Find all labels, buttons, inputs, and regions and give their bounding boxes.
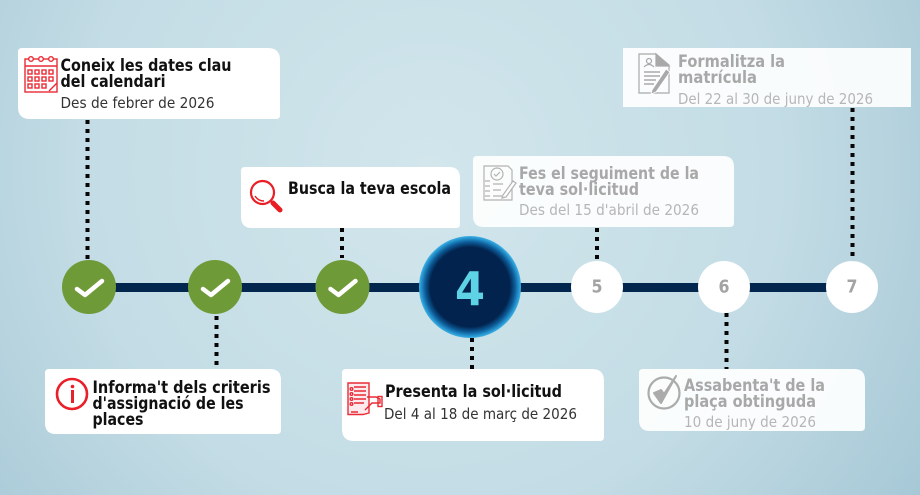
- heading: step 6: plaça obtinguda: [684, 392, 816, 411]
- heading: step 7: Formalitza la: [678, 52, 785, 71]
- icon: enrolment form: [639, 54, 670, 94]
- panel: step 6 assigned place: [639, 369, 865, 431]
- heading: step 1: del calendari: [60, 72, 166, 91]
- panel: step 5 tracking: [473, 156, 734, 227]
- step 3 marker: completed: [316, 260, 370, 314]
- icon: application form: [348, 383, 382, 414]
- panel: step 7 enrolment: [623, 48, 911, 108]
- step 5 marker: pending: [571, 261, 623, 313]
- connector: step 4: [470, 338, 474, 369]
- step 4 marker: current: 4: [455, 262, 485, 316]
- date: step 5: Des del 15 d'abril de 2026: [519, 201, 699, 219]
- step 7 marker: pending: 7: [846, 276, 858, 298]
- step 2 marker: completed: [188, 260, 242, 314]
- panel: step 2 criteria: [45, 369, 281, 434]
- heading: step 2: places: [92, 410, 144, 429]
- connector: step 3: [340, 228, 344, 258]
- step 1 marker: completed: [62, 260, 116, 314]
- heading: step 5: teva sol·licitud: [519, 180, 639, 199]
- heading: step 1: Coneix les dates clau: [60, 56, 232, 75]
- heading: step 6: Assabenta't de la: [684, 376, 825, 395]
- heading: step 4: Presenta la sol·licitud: [385, 382, 562, 401]
- step 7 marker: pending: [826, 261, 878, 313]
- step 5 marker: pending: 5: [592, 276, 602, 298]
- icon: calendar: [25, 57, 57, 92]
- step 4 marker: current: [419, 236, 521, 338]
- icon: checklist with pencil: [484, 166, 516, 200]
- date: step 4: Del 4 al 18 de març de 2026: [384, 405, 577, 423]
- heading: step 5: Fes el seguiment de la: [519, 164, 699, 183]
- step 6 marker: pending: [698, 261, 750, 313]
- icon: magnifier: [251, 181, 280, 210]
- connector: step 2: [214, 316, 218, 369]
- date: step 1: Des de febrer de 2026: [60, 94, 214, 112]
- connector: step 1: [86, 120, 90, 262]
- panel: step 1 dates: [18, 48, 280, 119]
- connector: step 7: [850, 108, 854, 262]
- date: step 6: 10 de juny de 2026: [684, 413, 816, 431]
- heading: step 2: Informa't dels criteris: [92, 378, 271, 397]
- panel: step 3 school search: [241, 167, 460, 228]
- panel: step 4 application: [342, 369, 604, 441]
- icon: check badge: [648, 376, 680, 408]
- date: step 7: Del 22 al 30 de juny de 2026: [678, 90, 873, 108]
- heading: step 3: Busca la teva escola: [288, 179, 451, 198]
- icon: information: [57, 379, 87, 409]
- timeline line: [89, 283, 852, 292]
- heading: step 7: matrícula: [678, 68, 757, 87]
- step 6 marker: pending: 6: [718, 276, 730, 298]
- connector: step 5: [595, 228, 599, 262]
- connector: step 6: [724, 313, 728, 369]
- heading: step 2: d'assignació de les: [92, 394, 244, 413]
